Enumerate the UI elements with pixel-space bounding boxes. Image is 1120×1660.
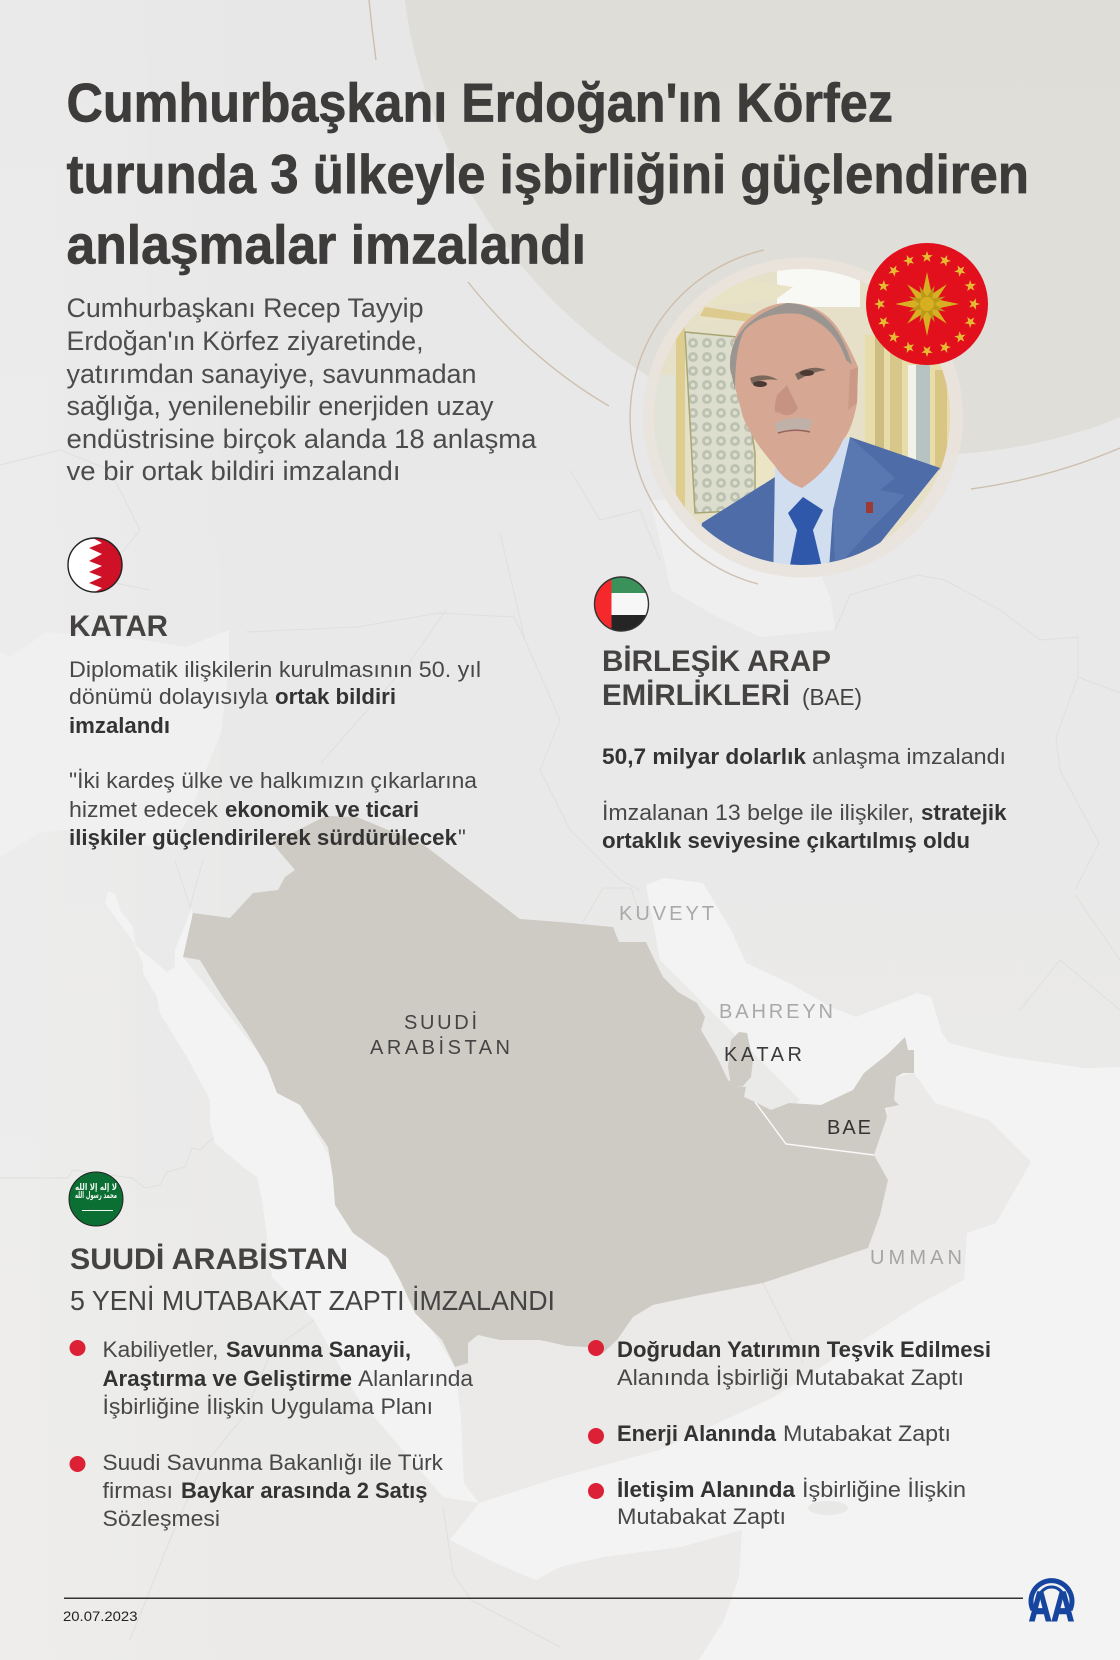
- title: [66, 72, 1029, 276]
- icon: Saudi flag: محمد رسول الله: [75, 1191, 117, 1201]
- map: Saudi Arabia: [183, 816, 888, 1367]
- map labels: UMMAN: [870, 1247, 962, 1269]
- bullet: direct investment: Doğrudan Yatırımın Teşvik Edilmesi: [617, 1337, 991, 1362]
- intro paragraph: Erdoğan'ın Körfez ziyaretinde,: [66, 326, 424, 356]
- bullet: energy: [588, 1421, 951, 1446]
- panel: United Arab Emirates: [602, 645, 1007, 853]
- title: anlaşmalar imzalandı: [66, 214, 586, 276]
- heading: UAE: BİRLEŞİK ARAP: [602, 645, 831, 678]
- text: Katar first paragraph: imzalandı: [69, 713, 170, 738]
- text: UAE deal value: anlaşma imzalandı: [812, 744, 1006, 769]
- photo: lapel pin: [866, 502, 873, 513]
- intro paragraph: [66, 293, 538, 486]
- text: Katar quote: "İki kardeş ülke ve halkımızın çıkarlarına: [69, 768, 478, 793]
- map: United Arab Emirates: [755, 1037, 914, 1155]
- heading: UAE: (BAE): [802, 684, 862, 710]
- bullet: defence plan: İşbirliğine İlişkin Uygulama Planı: [102, 1394, 433, 1419]
- text: Katar first paragraph: ortak bildiri: [275, 684, 396, 709]
- text: UAE strategic partnership: [602, 800, 1007, 853]
- photo: window and ceiling: [777, 268, 860, 307]
- icon: UAE flag: [594, 576, 650, 633]
- beige background circle: [400, 0, 1120, 455]
- photo: ornamental wall panel: [676, 326, 685, 508]
- intro paragraph: sağlığa, yenilenebilir enerjiden uzay: [66, 391, 494, 421]
- text: UAE strategic partnership: stratejik: [921, 800, 1007, 825]
- text: UAE deal value: 50,7 milyar dolarlık: [602, 744, 807, 769]
- map: Persian Gulf and Arabian Sea: [450, 878, 1120, 1660]
- photo: shirt and tie: [774, 437, 850, 564]
- bullet: Baykar contracts: firması: [102, 1478, 173, 1503]
- panel: Saudi Arabia: [70, 1243, 991, 1531]
- map: Saudi UAE border: [755, 1102, 874, 1155]
- text: Katar first paragraph: [69, 657, 481, 738]
- map: Qatar: [728, 1032, 753, 1087]
- text: UAE strategic partnership: ortaklık seviyesine çıkartılmış oldu: [602, 828, 970, 853]
- text: Katar first paragraph: Diplomatik ilişkilerin kurulmasının 50. yıl: [69, 657, 481, 682]
- bullet: defence plan: Alanlarında: [358, 1366, 474, 1391]
- photo ring: [643, 258, 963, 578]
- footer rule: [64, 1598, 1023, 1599]
- text: Katar quote: ekonomik ve ticari: [225, 797, 419, 822]
- portrait photo: [654, 269, 950, 565]
- map: Mediterranean Sea: [0, 630, 229, 857]
- map: Gulf of Aden islet: [808, 1501, 848, 1515]
- panel: Katar: [69, 610, 481, 850]
- map labels: SUUDİ: [404, 1011, 477, 1034]
- text: UAE strategic partnership: İmzalanan 13 belge ile ilişkiler,: [602, 800, 914, 825]
- emblem: sixteen stars: [874, 251, 980, 357]
- map labels: BAE: [827, 1117, 871, 1139]
- emblem: central sun: [895, 272, 959, 336]
- bullet: communications: İletişim Alanında: [617, 1477, 796, 1502]
- bullet: Baykar contracts: Sözleşmesi: [102, 1506, 220, 1531]
- heading: UAE: EMİRLİKLERİ: [602, 679, 790, 712]
- map labels: KUVEYT: [619, 903, 714, 925]
- heading: Katar: KATAR: [69, 610, 168, 643]
- heading: Saudi Arabia: SUUDİ ARABİSTAN: [70, 1243, 348, 1276]
- bullet: Baykar contracts: Baykar arasında 2 Satış: [181, 1478, 428, 1503]
- text: Katar quote: ilişkiler güçlendirilerek sürdürülecek: [69, 825, 458, 850]
- text: Katar quote: [69, 768, 478, 850]
- bullet: communications: İşbirliğine İlişkin: [802, 1477, 966, 1502]
- map labels: ARABİSTAN: [370, 1036, 510, 1059]
- icon: Saudi flag: لا إله إلا الله: [75, 1183, 117, 1193]
- map: country borders: [0, 450, 1120, 1647]
- map: Yemen and Oman land: [455, 1073, 1031, 1503]
- icon: Saudi flag: [69, 1172, 123, 1226]
- logo: Anadolu Agency: AA: [1029, 1583, 1074, 1630]
- photo: suit: [702, 477, 775, 562]
- text: UAE deal value: [602, 744, 1006, 769]
- date: 20.07.2023: [63, 1608, 138, 1624]
- bullet: Baykar contracts: Suudi Savunma Bakanlığı ile Türk: [102, 1450, 444, 1475]
- bullet: energy: Mutabakat Zaptı: [783, 1421, 951, 1446]
- photo: right columns: [865, 335, 955, 470]
- bullet: defence plan: [70, 1337, 474, 1419]
- text: Katar quote: ": [458, 825, 466, 850]
- intro paragraph: yatırımdan sanayiye, savunmadan: [66, 359, 476, 389]
- map: Caspian Sea: [650, 500, 835, 637]
- emblem: presidential seal: [866, 243, 988, 365]
- intro paragraph: Cumhurbaşkanı Recep Tayyip: [66, 293, 424, 323]
- bullet: defence plan: Savunma Sanayii,: [226, 1337, 411, 1362]
- bullet: direct investment: Alanında İşbirliği Mutabakat Zaptı: [617, 1365, 964, 1390]
- bullet: direct investment: [588, 1337, 991, 1390]
- text: Katar quote: hizmet edecek: [69, 797, 219, 822]
- bullet: defence plan: Kabiliyetler,: [102, 1337, 218, 1362]
- bullet: defence plan: Araştırma ve Geliştirme: [102, 1366, 352, 1391]
- text: Katar first paragraph: dönümü dolayısıyla: [69, 684, 269, 709]
- bullet: energy: Enerji Alanında: [617, 1421, 777, 1446]
- map labels: [370, 903, 962, 1269]
- title: Cumhurbaşkanı Erdoğan'ın Körfez: [66, 72, 893, 134]
- map labels: BAHREYN: [719, 1001, 833, 1023]
- heading: UAE: [602, 645, 862, 712]
- title: turunda 3 ülkeyle işbirliğini güçlendiren: [66, 143, 1029, 205]
- map labels: KATAR: [724, 1044, 802, 1066]
- subheading: Saudi Arabia: 5 YENİ MUTABAKAT ZAPTI İMZALANDI: [70, 1285, 555, 1316]
- bullet: communications: [588, 1477, 966, 1529]
- icon: Katar section flag: [68, 537, 122, 593]
- map: Red Sea: [105, 892, 479, 1503]
- intro paragraph: endüstrisine birçok alanda 18 anlaşma: [66, 424, 538, 454]
- intro paragraph: ve bir ortak bildiri imzalandı: [66, 456, 401, 486]
- decorative tan arcs: [369, 0, 1120, 584]
- bullet: Baykar contracts: [70, 1450, 444, 1531]
- photo: head: [732, 303, 858, 488]
- bullet: communications: Mutabakat Zaptı: [617, 1504, 786, 1529]
